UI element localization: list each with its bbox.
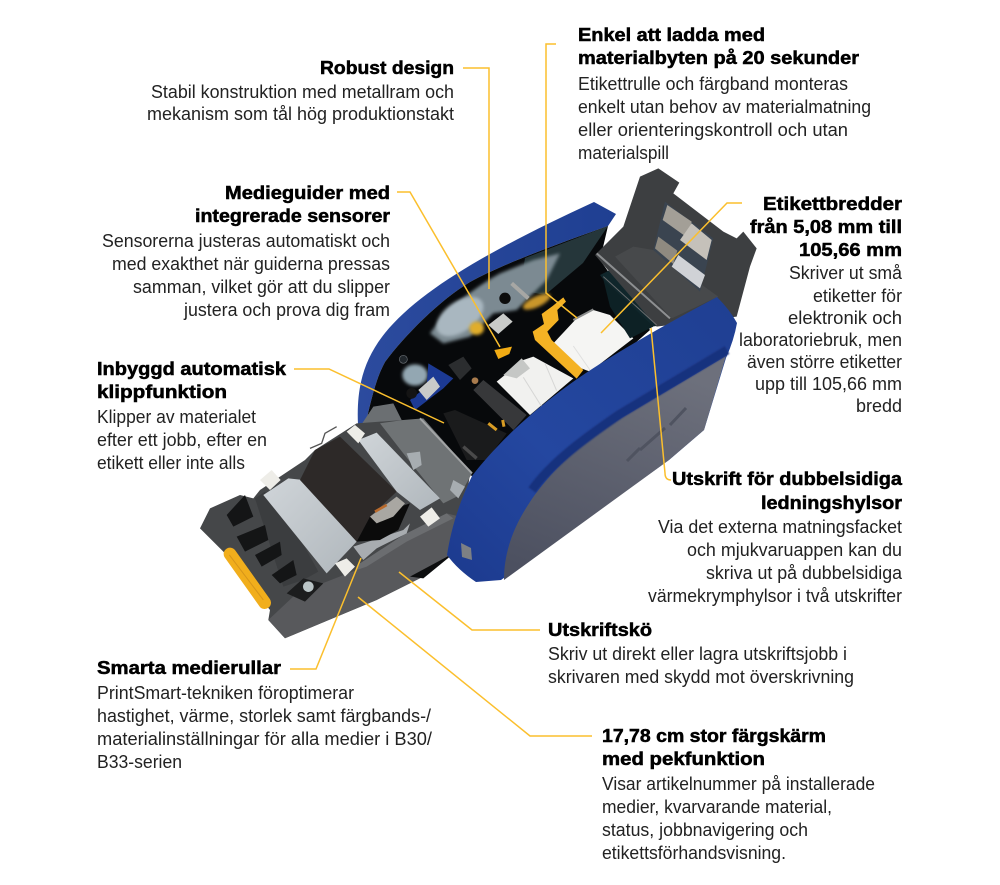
text block: Robust design	[147, 58, 454, 124]
text block: Smarta medierullar: PrintSmart-tekniken föroptimerar	[97, 683, 354, 703]
text block: Färgskärm med pekfunktion: medier, kvarvarande material,	[602, 797, 832, 817]
text block: Utskrift för dubbelsidiga ledningshylsor	[648, 469, 903, 606]
text block: Utskrift för dubbelsidiga ledningshylsor: Utskrift för dubbelsidiga	[672, 469, 903, 489]
text block: Utskriftskö: Skriv ut direkt eller lagra utskriftsjobb i	[548, 644, 847, 664]
text block: Färgskärm med pekfunktion: med pekfunktion	[602, 749, 765, 769]
text block: Enkel att ladda: Enkel att ladda med	[578, 25, 765, 45]
text block: Etikettbredder: Skriver ut små	[789, 263, 903, 283]
roll caps	[260, 425, 440, 577]
text block: Utskrift för dubbelsidiga ledningshylsor: värmekrymphylsor i två utskrifter	[648, 586, 902, 606]
text block: Inbyggd automatisk klippfunktion: Klipper av materialet	[97, 407, 256, 427]
text block: Enkel att ladda: materialbyten på 20 sekunder	[578, 48, 859, 68]
ribbon roll right	[358, 433, 440, 510]
text block: Enkel att ladda: eller orienteringskontroll och utan	[578, 120, 848, 140]
lid with instruction sticker	[595, 168, 757, 338]
text block: Smarta medierullar: hastighet, värme, storlek samt färgbands-/	[97, 706, 431, 726]
text block: Robust design: Robust design	[320, 58, 454, 78]
text block: Utskrift för dubbelsidiga ledningshylsor: och mjukvaruappen kan du	[687, 540, 902, 560]
slats	[227, 492, 323, 602]
leader: Enkel att ladda	[546, 44, 577, 318]
tray	[200, 418, 472, 638]
text block: Utskrift för dubbelsidiga ledningshylsor: Via det externa matningsfacket	[658, 517, 902, 537]
lower wall	[268, 513, 460, 638]
text block: Etikettbredder: 105,66 mm	[799, 240, 902, 260]
text block: Smarta medierullar: B33-serien	[97, 752, 182, 772]
gray mechanism	[360, 403, 470, 490]
text block: Smarta medierullar: materialinställningar för alla medier i B30/	[97, 729, 432, 749]
text block: Medieguider: integrerade sensorer	[195, 206, 390, 226]
leader: Färgskärm	[358, 597, 592, 736]
leader: Utskriftskö	[399, 572, 540, 630]
text block: Enkel att ladda: materialspill	[578, 143, 669, 163]
ribbon roll left	[263, 478, 357, 573]
text block: Färgskärm med pekfunktion: Visar artikelnummer på installerade	[602, 774, 875, 794]
text block: Smarta medierullar: Smarta medierullar	[97, 658, 281, 678]
printer front housing	[447, 297, 737, 582]
text block: Etikettbredder: Etikettbredder	[763, 194, 902, 214]
text block: Medieguider: Sensorerna justeras automatiskt och	[102, 231, 390, 251]
leader: Dubbelsidiga	[651, 328, 671, 480]
leader lines	[290, 44, 742, 736]
text block: Etikettbredder: elektronik och	[788, 308, 902, 328]
text block: Inbyggd automatisk klippfunktion: klippfunktion	[97, 382, 227, 402]
text block: Utskriftskö: skrivaren med skydd mot överskrivning	[548, 667, 854, 687]
text block: Utskriftskö	[548, 620, 854, 687]
text block: Utskriftskö: Utskriftskö	[548, 620, 652, 640]
leader: Medieguider	[397, 192, 500, 347]
text block: Etikettbredder: etiketter för	[813, 286, 902, 306]
text block: Färgskärm med pekfunktion: 17,78 cm stor färgskärm	[602, 726, 826, 746]
printer back housing	[358, 202, 616, 435]
yellow material guide	[533, 297, 583, 379]
text block: Etikettbredder: även större etiketter	[747, 352, 902, 372]
text block: Robust design: Stabil konstruktion med metallram och	[151, 82, 454, 102]
leader: Smarta medierullar	[290, 558, 361, 669]
text block: Inbyggd automatisk klippfunktion: etikett eller inte alls	[97, 453, 245, 473]
text block: Medieguider: justera och prova dig fram	[183, 300, 390, 320]
leader: Automatisk klippfunktion	[294, 369, 444, 423]
text block: Etikettbredder: upp till 105,66 mm	[755, 374, 902, 394]
text block: Utskrift för dubbelsidiga ledningshylsor: skriva ut på dubbelsidiga	[706, 563, 903, 583]
text block: Robust design: mekanism som tål hög produktionstakt	[147, 104, 454, 124]
text block: Etikettbredder: bredd	[856, 396, 902, 416]
text block: Medieguider	[102, 183, 390, 320]
text block: Inbyggd automatisk klippfunktion	[97, 359, 287, 473]
printer interior	[360, 226, 665, 490]
yellow knob	[494, 347, 512, 359]
support rod	[603, 279, 653, 338]
yellow handle	[230, 554, 265, 603]
text block: Etikettbredder: från 5,08 mm till	[750, 217, 902, 237]
translucent light platform	[353, 523, 410, 560]
text block: Medieguider: samman, vilket gör att du slipper	[133, 277, 390, 297]
illustration: printer with open lid and tray	[200, 168, 757, 638]
leader: Etikettbredder	[601, 203, 742, 333]
text block: Färgskärm med pekfunktion: etikettsförhandsvisning.	[602, 843, 786, 863]
leader: Robust design	[463, 68, 489, 289]
print head	[300, 437, 397, 542]
text block: Färgskärm med pekfunktion: status, jobbnavigering och	[602, 820, 808, 840]
text block: Inbyggd automatisk klippfunktion: Inbyggd automatisk	[97, 359, 287, 379]
text block: Utskrift för dubbelsidiga ledningshylsor: ledningshylsor	[761, 493, 902, 513]
text block: Enkel att ladda	[578, 25, 871, 163]
text block: Enkel att ladda: enkelt utan behov av materialmatning	[578, 97, 871, 117]
text block: Etikettbredder	[739, 194, 903, 416]
text block: Färgskärm med pekfunktion	[602, 726, 875, 863]
text block: Enkel att ladda: Etikettrulle och färgband monteras	[578, 74, 848, 94]
text block: Smarta medierullar	[97, 658, 432, 772]
text block: Inbyggd automatisk klippfunktion: efter ett jobb, efter en	[97, 430, 267, 450]
gray mechanism	[380, 418, 472, 503]
text block: Medieguider: Medieguider med	[225, 183, 390, 203]
text block: Medieguider: med exakthet när guiderna pressas	[112, 254, 390, 274]
text block: Etikettbredder: laboratoriebruk, men	[739, 330, 902, 350]
